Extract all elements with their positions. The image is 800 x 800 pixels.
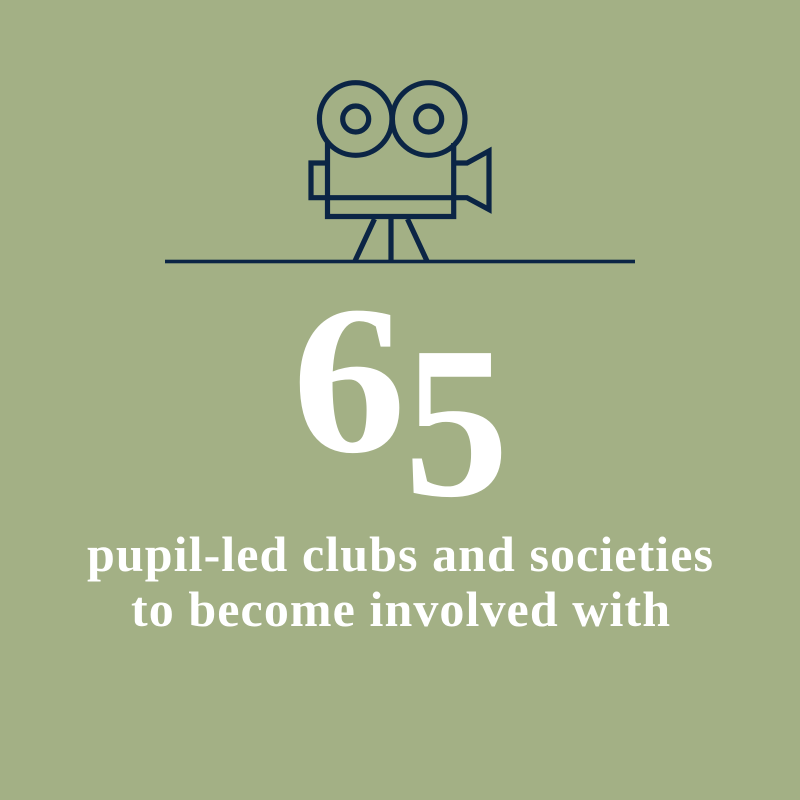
icon: film camera on tripod xyxy=(311,83,489,261)
big number: 65: 6 xyxy=(292,262,406,497)
caption: clubs and societies: pupil-led clubs and societies xyxy=(87,526,713,582)
caption: clubs and societies xyxy=(87,526,713,637)
big number: 65: 5 xyxy=(404,303,509,543)
caption: clubs and societies: to become involved with xyxy=(131,581,670,637)
big number: 65 xyxy=(292,262,509,543)
baseline rule xyxy=(165,260,635,263)
